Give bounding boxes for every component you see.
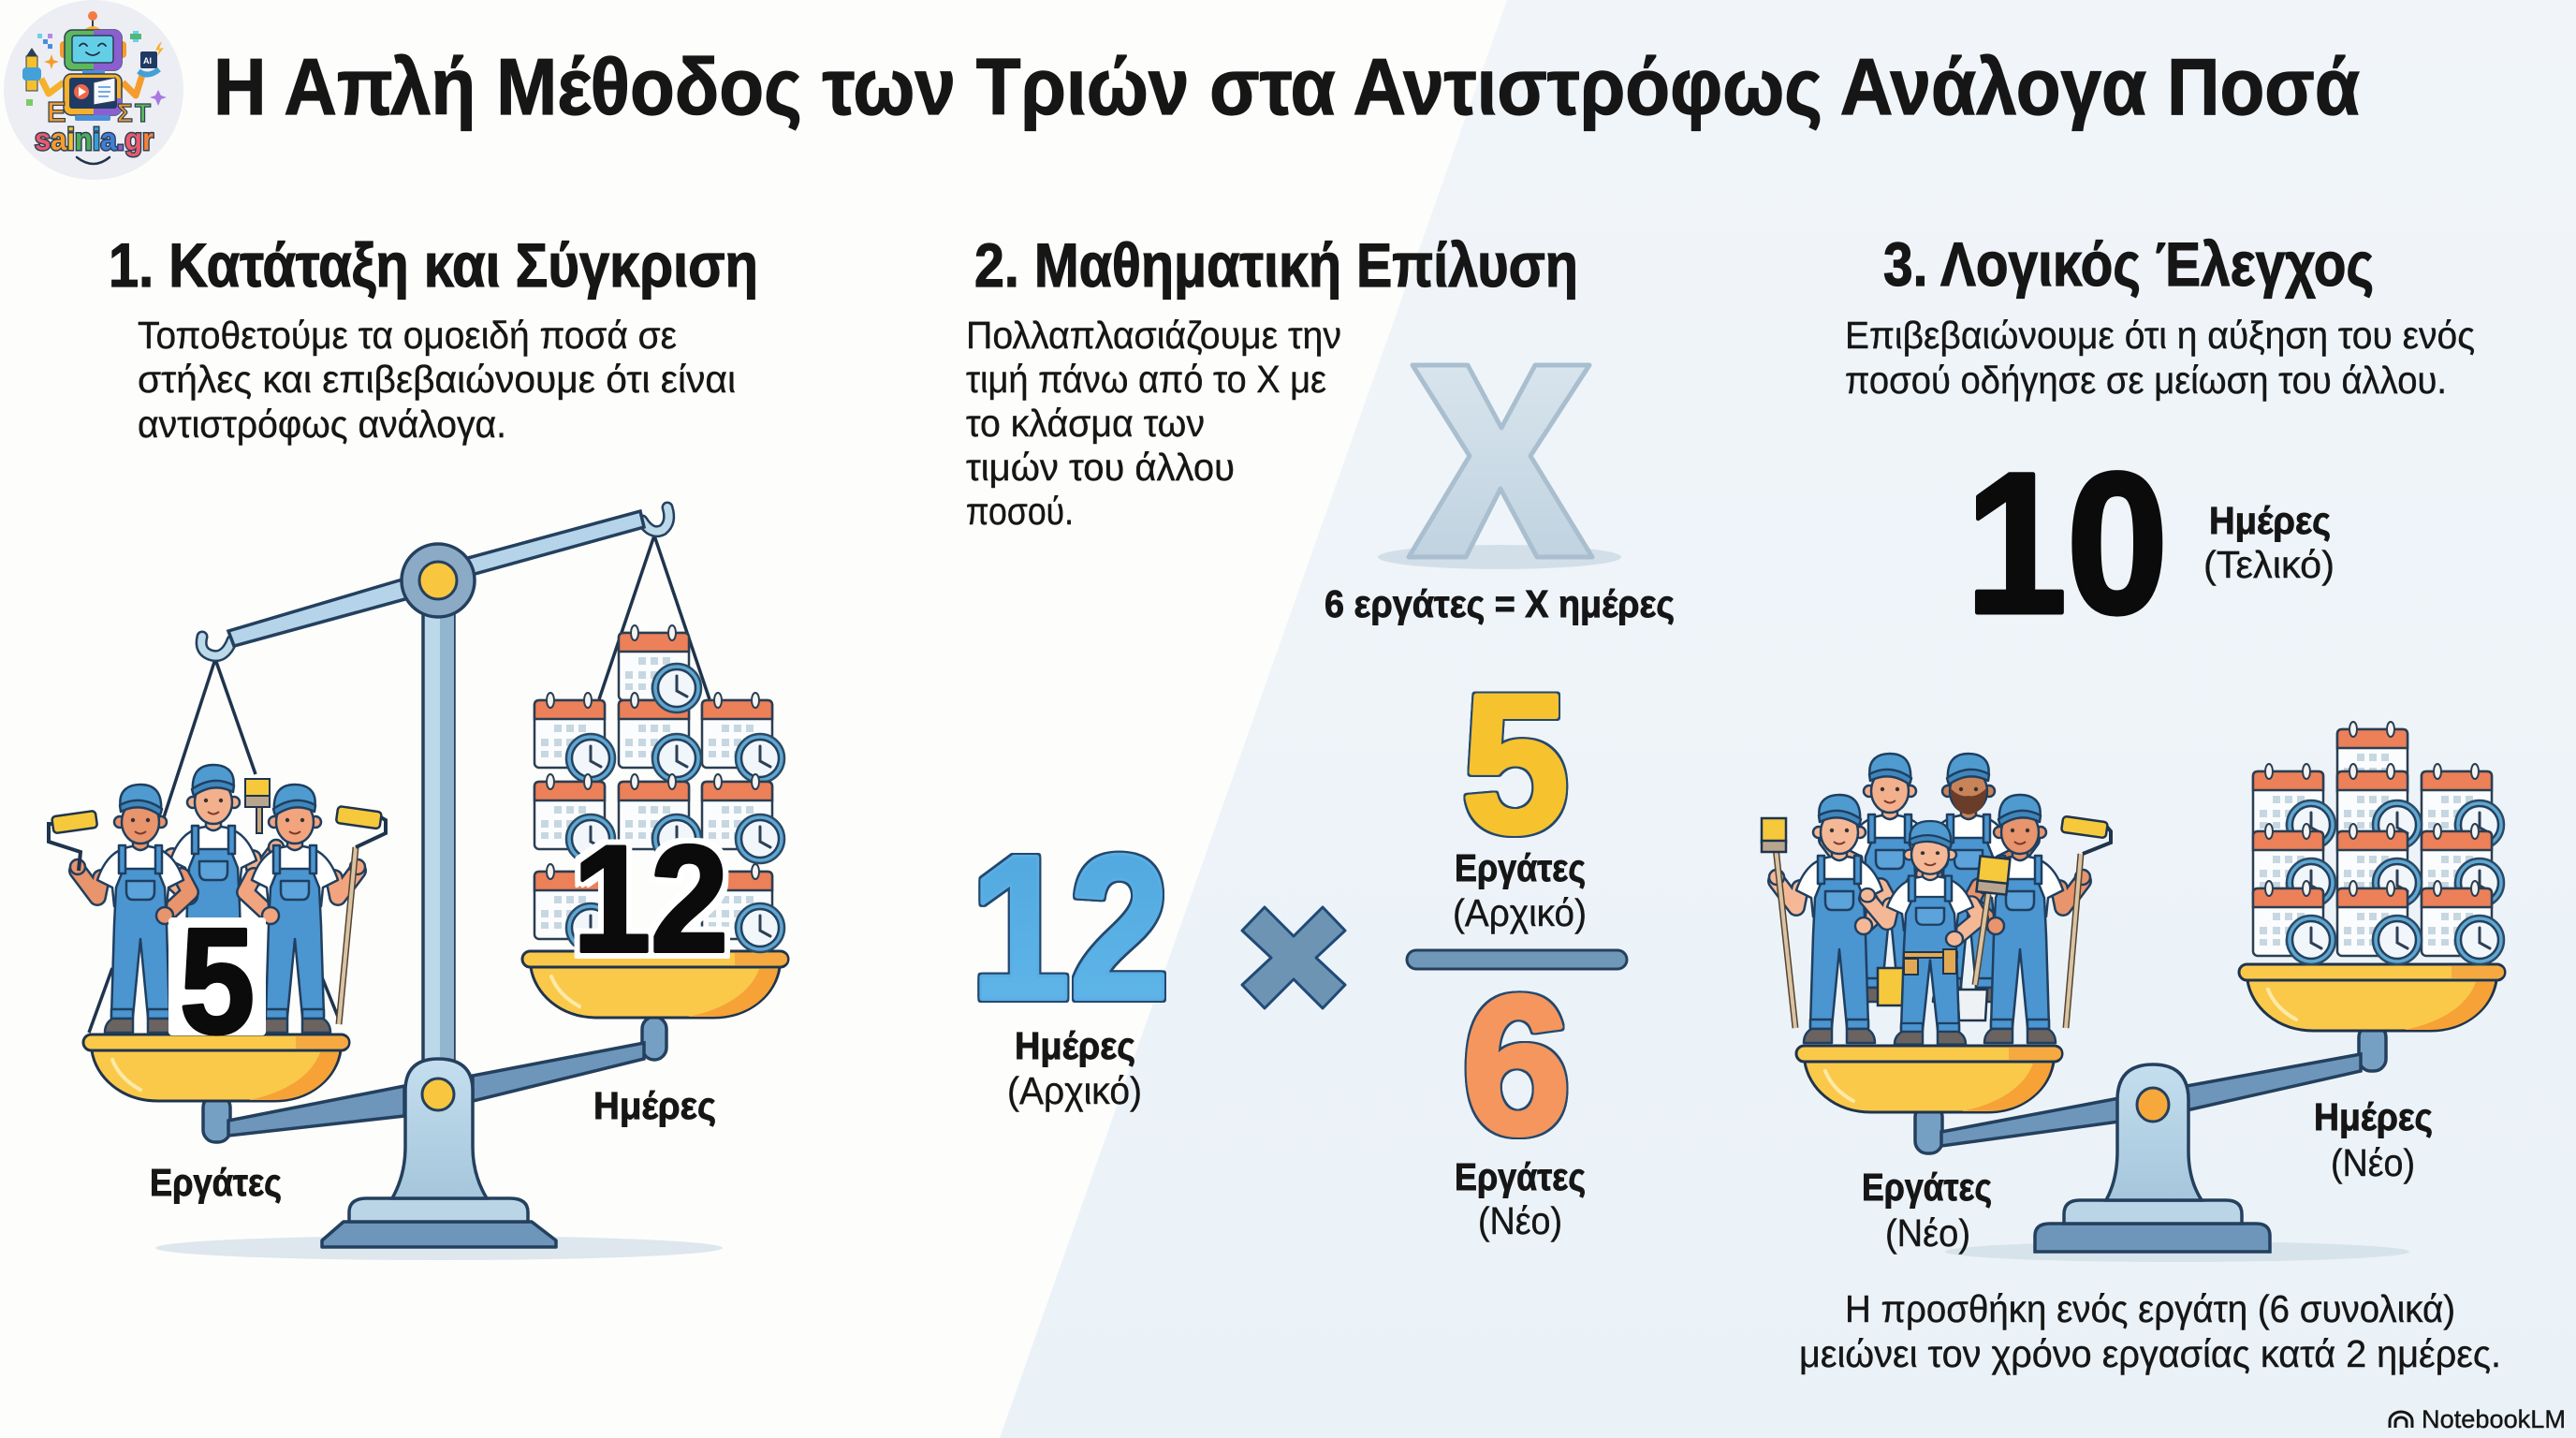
label: workers original: Εργάτες: [1455, 846, 1586, 889]
icon: paint roller right with pole: [336, 806, 386, 1024]
fraction numerator: 5: 5: [1462, 653, 1569, 873]
watermark: NotebookLM: NotebookLM: [2422, 1405, 2566, 1433]
icon: large X unknown: [1378, 365, 1621, 569]
label: workers new: Εργάτες: [1862, 1166, 1992, 1209]
fraction denominator: 6: 6: [1462, 955, 1571, 1175]
panel: step 2 mathematical solution: [966, 230, 1675, 1242]
text block: step 1 description: αντιστρόφως ανάλογα.: [138, 403, 506, 446]
panel: step 1 ranking and comparison: [49, 230, 788, 1260]
icon: paint brush with pole: [1762, 818, 1795, 1028]
result number: 10: 10: [1966, 432, 2168, 655]
text block: step 2 description: τιμών του άλλου: [966, 446, 1235, 489]
heading: step 1: 1. Κατάταξη και Σύγκριση: [109, 230, 758, 300]
logo letters: E Σ T: [47, 95, 151, 128]
label: new: (Νέο): [1478, 1199, 1562, 1242]
logo letters: E Σ T: Ε: [47, 95, 66, 128]
heading: step 3: 3. Λογικός Έλεγχος: [1883, 229, 2374, 299]
callout: conclusion text: μειώνει τον χρόνο εργασίας κατά 2 ημέρες.: [1799, 1332, 2501, 1375]
fraction bar: [1407, 950, 1627, 969]
workers group: five workers shown as three: [49, 765, 386, 1033]
text block: step 2 description: τιμή πάνω από το Χ με: [966, 358, 1326, 401]
label: days final: Ημέρες: [2209, 499, 2331, 542]
label: days: Ημέρες: [593, 1084, 716, 1127]
logo letters: E Σ T: Σ: [117, 98, 133, 127]
text block: step 1 description: στήλες και επιβεβαιώνουμε ότι είναι: [138, 358, 736, 401]
label: original: (Αρχικό): [1453, 891, 1587, 934]
heading: step 2: 2. Μαθηματική Επίλυση: [974, 230, 1578, 300]
icon: multiplication sign: [1242, 907, 1345, 1008]
logo robot: AI: [143, 56, 152, 66]
label: 6 workers equals X days: 6 εργάτες = Χ ημέρες: [1325, 582, 1675, 625]
tool belt: [1904, 949, 1957, 975]
balance scale: tipped with workers lowered: [1796, 964, 2505, 1262]
title: Η Απλή Μέθοδος των Τριών στα Αντιστρόφως Ανάλογα Ποσά: [213, 43, 2360, 132]
label: workers: Εργάτες: [150, 1161, 282, 1204]
formula: 12 days: 12: [971, 814, 1169, 1042]
number: 12 days: 12: [573, 814, 728, 984]
callout: conclusion text: Η προσθήκη ενός εργάτη (6 συνολικά): [1845, 1287, 2455, 1330]
logo letters: E Σ T: Τ: [135, 98, 151, 127]
label: new: (Νέο): [1885, 1211, 1970, 1255]
calendars on right pan: ten days: [2253, 722, 2504, 964]
panel: step 3 logical check: [1762, 229, 2505, 1375]
logo: sainia.gr robot badge: [4, 0, 183, 180]
workers group: six workers: [1762, 754, 2111, 1045]
icon: paint roller left: [49, 811, 97, 871]
label: workers new: Εργάτες: [1455, 1155, 1586, 1198]
icon: yellow paint bucket: [1878, 968, 1906, 1005]
icon: paint roller with pole: [2061, 816, 2111, 1028]
logo smile: [77, 157, 110, 164]
text block: step 2 description: ποσού.: [966, 490, 1074, 533]
label: days new: Ημέρες: [2314, 1095, 2433, 1138]
calendars on right pan: twelve days: [534, 625, 784, 952]
icon: paint brush: [245, 779, 270, 833]
logo sparkles: [26, 31, 167, 106]
logo robot: [22, 11, 159, 121]
text block: step 1 description: Τοποθετούμε τα ομοειδή ποσά σε: [138, 314, 677, 357]
background: light blue diagonal panel: [1000, 0, 2576, 1438]
label: original: (Αρχικό): [1007, 1069, 1142, 1112]
text block: step 2 description: το κλάσμα των: [966, 402, 1205, 445]
beard: [1951, 788, 1986, 814]
icon: white paint bucket: [1957, 990, 1987, 1020]
icon: centre paint brush: [1975, 856, 2010, 985]
logo wordmark: sainia.gr: [35, 122, 154, 156]
text block: step 3 description: ποσού οδήγησε σε μείωση του άλλου.: [1845, 359, 2447, 402]
text block: step 3 description: Επιβεβαιώνουμε ότι η αύξηση του ενός: [1845, 314, 2475, 357]
balance scale: tipped with days raised: [83, 507, 788, 1260]
text block: step 2 description: Πολλαπλασιάζουμε την: [966, 314, 1341, 357]
number: 5 workers: 5: [180, 897, 255, 1064]
label: days original: Ημέρες: [1015, 1024, 1135, 1067]
label: new: (Νέο): [2331, 1141, 2415, 1184]
label: final: (Τελικό): [2203, 543, 2334, 586]
icon: NotebookLM mark: [2390, 1412, 2412, 1428]
